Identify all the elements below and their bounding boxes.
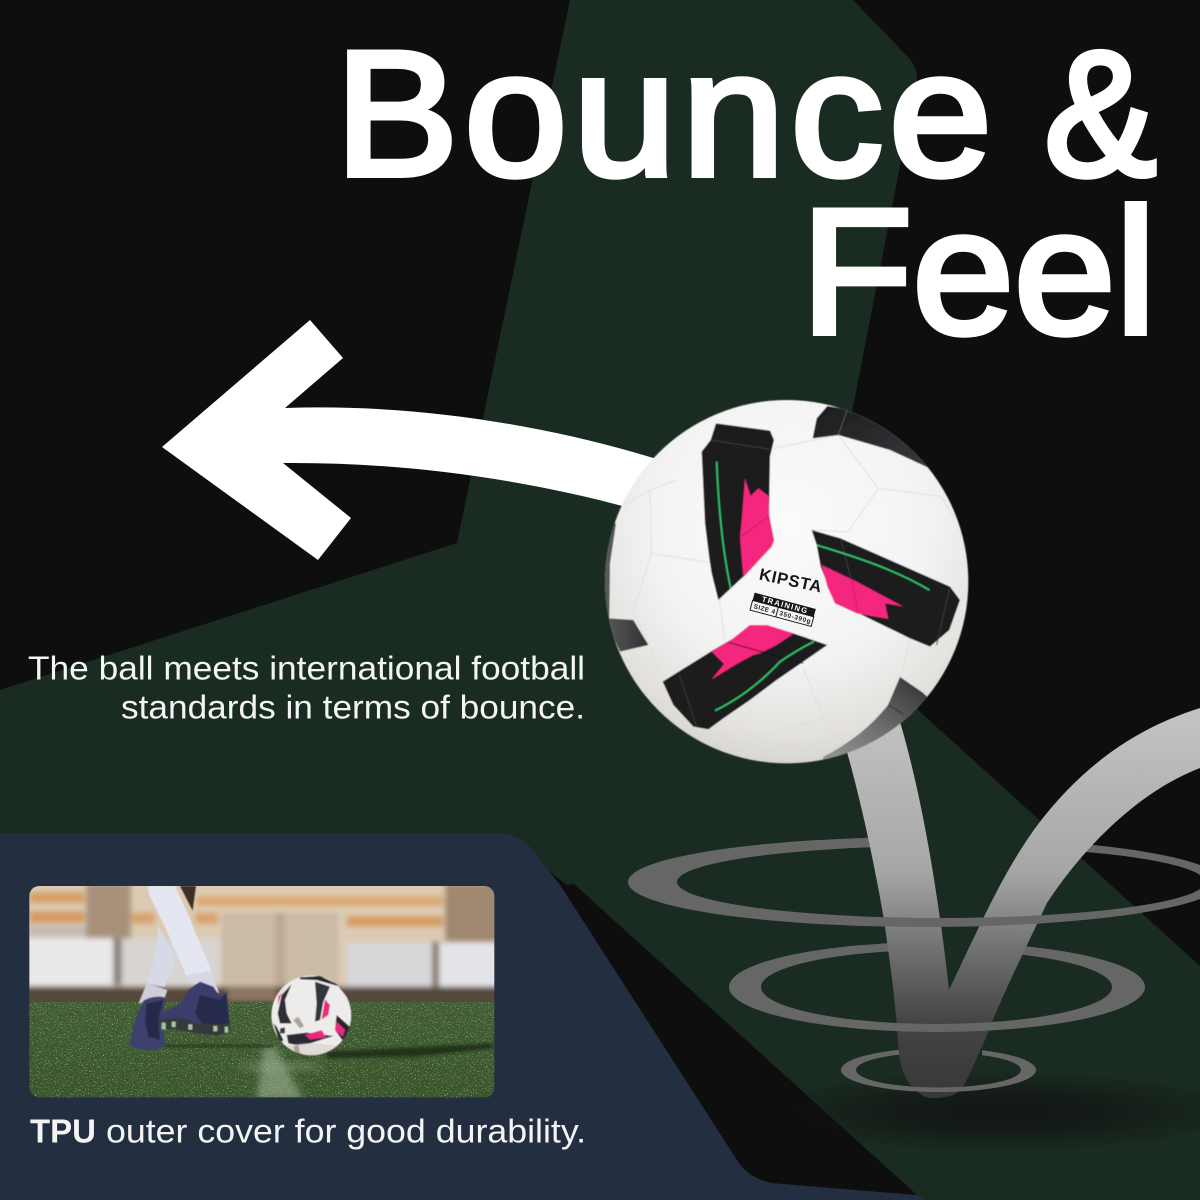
navy panel: [0, 833, 924, 1200]
training label: SIZE 4: [753, 603, 776, 616]
boot studs: [162, 1022, 228, 1033]
ball seams: [623, 435, 953, 767]
arrow pointing left: [162, 320, 660, 560]
ring front: large: [628, 884, 1200, 927]
training label: [750, 592, 816, 626]
match ball: [271, 975, 352, 1057]
caption body: outer cover for good durability.: [106, 1114, 586, 1150]
rear leg: [147, 927, 177, 987]
rear ankle: [138, 983, 167, 1004]
ground shadow: [750, 1070, 1200, 1154]
stadium background: [29, 886, 494, 1008]
title line 1: Bounce: [335, 15, 998, 213]
ring front: medium: [730, 990, 1144, 1032]
top right panel: [813, 406, 933, 470]
bounce description text: The ball meets international football: [28, 650, 585, 688]
caption bold keyword: TPU: [30, 1114, 96, 1150]
upper band: [702, 423, 774, 600]
grass: [20, 1002, 503, 1102]
ring rear: large: [628, 838, 1200, 884]
green line upper: [717, 462, 731, 588]
pink flash right: [822, 565, 903, 619]
title line 1: &: [1044, 15, 1157, 213]
rear boot: [130, 997, 165, 1050]
black wedge between panel and green: [562, 884, 917, 1195]
boot shadow: [163, 1044, 273, 1048]
title: [335, 15, 1157, 371]
bounce ribbon path: [845, 708, 1200, 1098]
white pitch line: [257, 1047, 303, 1100]
training label: TRAINING: [761, 595, 808, 615]
front ankle: [187, 971, 219, 993]
ring front: small: [842, 1074, 1034, 1092]
green line right: [817, 545, 929, 590]
front leg: [147, 886, 212, 980]
green line bottom: [715, 642, 814, 711]
bottom band: [663, 625, 827, 729]
skin: [180, 886, 196, 911]
title line 2: Feel: [801, 172, 1156, 371]
boot sole: [158, 1018, 230, 1035]
front boot: [158, 982, 230, 1027]
football: [590, 400, 968, 783]
bounce description text: standards in terms of bounce.: [121, 690, 585, 726]
ball shadow: [327, 1043, 493, 1058]
ring rear: medium: [729, 943, 1145, 990]
pink flash bottom: [712, 625, 794, 679]
training label: 350-390g: [779, 610, 811, 625]
right band: [812, 530, 960, 647]
bounce description text: [28, 650, 585, 726]
pink flash upper: [740, 478, 774, 577]
ring rear: small: [841, 1050, 1036, 1074]
caption: [30, 1114, 586, 1150]
player legs and boots: [130, 886, 230, 1050]
bounce graphic: [628, 708, 1200, 1098]
lower right grey panel: [822, 676, 928, 760]
KIPSTA logo: KIPSTA: [758, 565, 823, 596]
left grey panel: [604, 522, 649, 652]
photo: player and ball on pitch: [29, 886, 494, 1098]
